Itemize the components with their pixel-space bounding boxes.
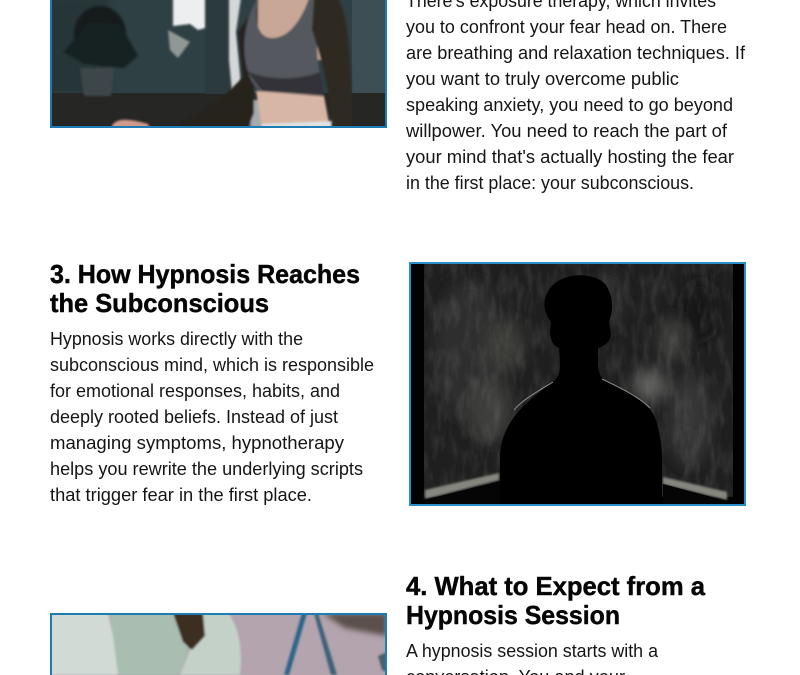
- text block: section 2 closing paragraph: you to confront your fear head on. There: [406, 17, 727, 37]
- text block: section 4 paragraph: A hypnosis session starts with a: [406, 641, 659, 661]
- text block: section 3 paragraph: deeply rooted beliefs. Instead of just: [50, 407, 338, 427]
- text block: section 3 paragraph: for emotional responses, habits, and: [50, 381, 340, 401]
- text block: section 3 paragraph: [50, 329, 374, 505]
- text block: section 3 paragraph: managing symptoms, hypnotherapy: [50, 433, 344, 453]
- window sill: [425, 473, 499, 499]
- text block: section 2 closing paragraph: in the first place: your subconscious.: [406, 173, 694, 193]
- photo: person in a pale green jacket: [50, 613, 387, 675]
- person silhouette: [500, 275, 662, 506]
- text block: section 3 paragraph: that trigger fear in the first place.: [50, 485, 312, 505]
- woman: [111, 0, 352, 128]
- heading: section 4: [406, 571, 706, 630]
- text block: section 2 closing paragraph: [405, 0, 746, 193]
- heading: section 3: 3. How Hypnosis Reaches: [50, 259, 360, 289]
- text block: section 2 closing paragraph: willpower. You need to reach the part of: [405, 121, 728, 141]
- photo: silhouette facing a dark reflective window: [409, 262, 746, 506]
- heading: section 3: [50, 259, 360, 318]
- heading: section 4: Hypnosis Session: [406, 600, 620, 630]
- heading: section 4: 4. What to Expect from a: [406, 571, 706, 601]
- text block: section 3 paragraph: helps you rewrite the underlying scripts: [50, 459, 363, 479]
- plant: [64, 6, 138, 96]
- text block: section 2 closing paragraph: your mind that's actually hosting the fear: [406, 147, 734, 167]
- text block: section 2 closing paragraph: are breathing and relaxation techniques. If: [406, 43, 746, 63]
- text block: section 3 paragraph: Hypnosis works directly with the: [50, 329, 303, 349]
- bright window light: [173, 0, 241, 92]
- heading: section 3: the Subconscious: [50, 288, 269, 318]
- text block: section 2 closing paragraph: you want to truly overcome public: [406, 69, 679, 89]
- text block: section 3 paragraph: subconscious mind, which is responsible: [50, 355, 374, 375]
- text block: section 2 closing paragraph: speaking anxiety, you need to go beyond: [406, 95, 733, 115]
- text block: section 4 paragraph: [406, 641, 659, 675]
- photo: woman meditating in a dim room: [50, 0, 387, 128]
